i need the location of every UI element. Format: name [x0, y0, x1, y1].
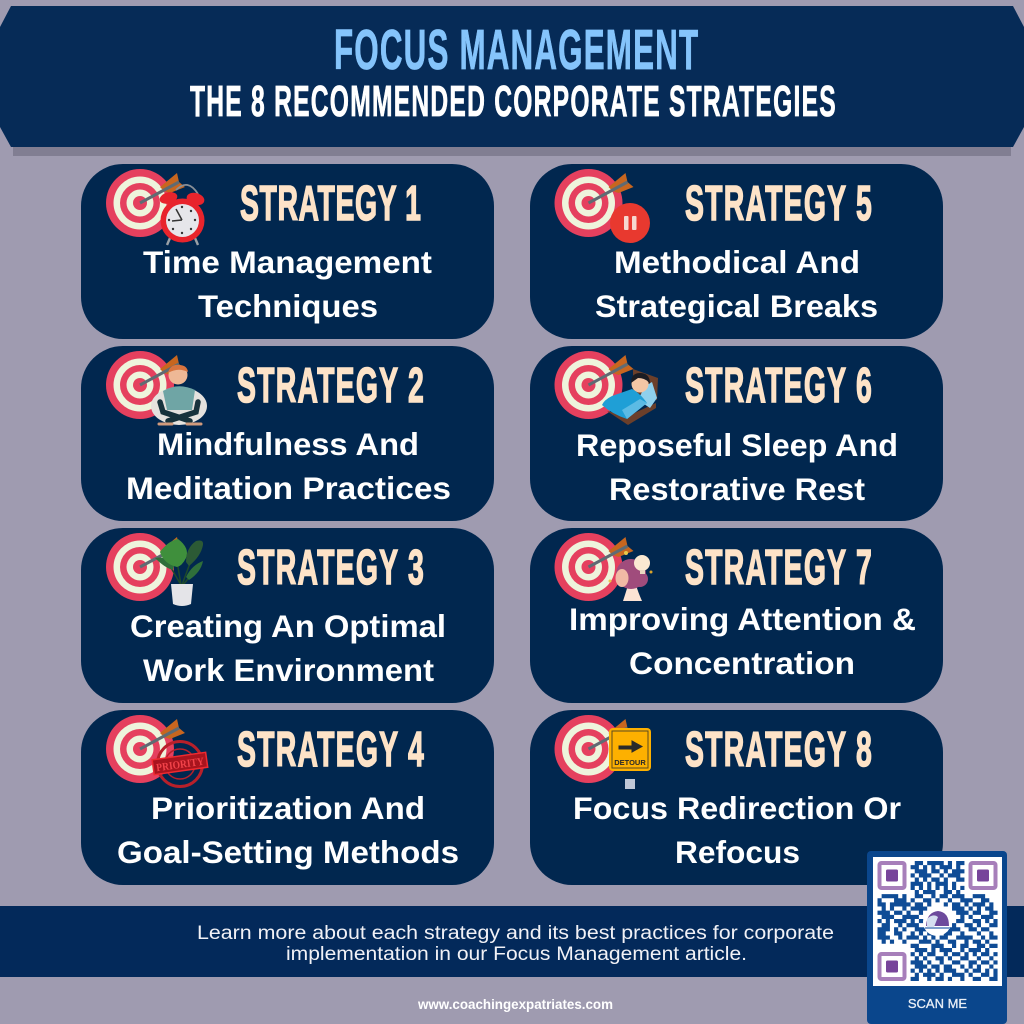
heading: STRATEGY 2: [237, 359, 424, 413]
subtitle: THE 8 RECOMMENDED CORPORATE STRATEGIES: [190, 77, 836, 126]
icon: target with meditating person: [106, 351, 207, 425]
text block: [117, 790, 459, 870]
panel: strategy 8: [530, 710, 943, 885]
text block: [576, 427, 898, 507]
panel: strategy 7: [530, 528, 943, 703]
icon: target with clock: [106, 169, 206, 245]
text block: [143, 244, 433, 324]
text block: Reposeful Sleep And: [576, 427, 898, 463]
panel: strategy 4: [81, 710, 494, 885]
text block: Prioritization And: [151, 790, 425, 826]
icon: target with thinking head: [554, 533, 652, 601]
panel: strategy 2: [81, 346, 494, 521]
panel: strategy 5: [530, 164, 943, 339]
text block: Meditation Practices: [126, 470, 451, 506]
heading: STRATEGY 5: [685, 177, 872, 231]
heading: STRATEGY 3: [237, 541, 424, 595]
website url: www.coachingexpatriates.com: [417, 997, 613, 1012]
text block: Time Management: [143, 244, 433, 280]
text block: [573, 790, 901, 870]
QR modules: [878, 863, 998, 979]
panel: strategy 6: [530, 346, 943, 521]
call to action text: implementation in our Focus Management article.: [286, 944, 747, 965]
text block: Creating An Optimal: [130, 608, 446, 644]
panel: strategy 1: [81, 164, 494, 339]
heading: STRATEGY 7: [685, 541, 872, 595]
footer band: [0, 906, 1024, 977]
scan me label: SCAN ME: [908, 996, 967, 1011]
text block: Work Environment: [143, 652, 435, 688]
QR finder: bottom left: [880, 954, 904, 979]
heading: STRATEGY 4: [237, 723, 424, 777]
QR code card: [867, 851, 1007, 1024]
text block: Mindfulness And: [157, 426, 419, 462]
QR finder: top right: [970, 863, 996, 888]
text block: Strategical Breaks: [595, 288, 878, 324]
icon: target with priority stamp: PRIORITY: [156, 756, 205, 774]
icon: target with detour sign: DETOUR: [614, 758, 646, 767]
icon: target with potted plant: [106, 533, 203, 606]
text block: Improving Attention &: [569, 601, 916, 637]
QR centre logo: [923, 908, 951, 936]
call to action text: Learn more about each strategy and its best practices for corporate: [197, 923, 834, 944]
text block: Techniques: [198, 288, 378, 324]
text block: Concentration: [629, 645, 855, 681]
text block: [569, 601, 916, 681]
text block: [126, 426, 451, 506]
header banner: [0, 6, 1024, 156]
icon: target with person in bed: [554, 351, 658, 425]
text block: [595, 244, 878, 324]
heading: STRATEGY 6: [685, 359, 872, 413]
title: FOCUS MANAGEMENT: [334, 17, 698, 81]
QR finder: top left: [880, 863, 904, 888]
heading: STRATEGY 1: [240, 177, 421, 231]
icon: target with priority stamp: [106, 715, 208, 786]
call to action text: [197, 923, 834, 965]
text block: [130, 608, 446, 688]
icon: target with pause button: [554, 169, 650, 243]
text block: Focus Redirection Or: [573, 790, 901, 826]
text block: Refocus: [675, 834, 800, 870]
text block: Restorative Rest: [609, 471, 866, 507]
icon: target with detour sign: [554, 715, 651, 789]
text block: Goal-Setting Methods: [117, 834, 459, 870]
heading: STRATEGY 8: [685, 723, 872, 777]
panel: strategy 3: [81, 528, 494, 703]
text block: Methodical And: [614, 244, 860, 280]
